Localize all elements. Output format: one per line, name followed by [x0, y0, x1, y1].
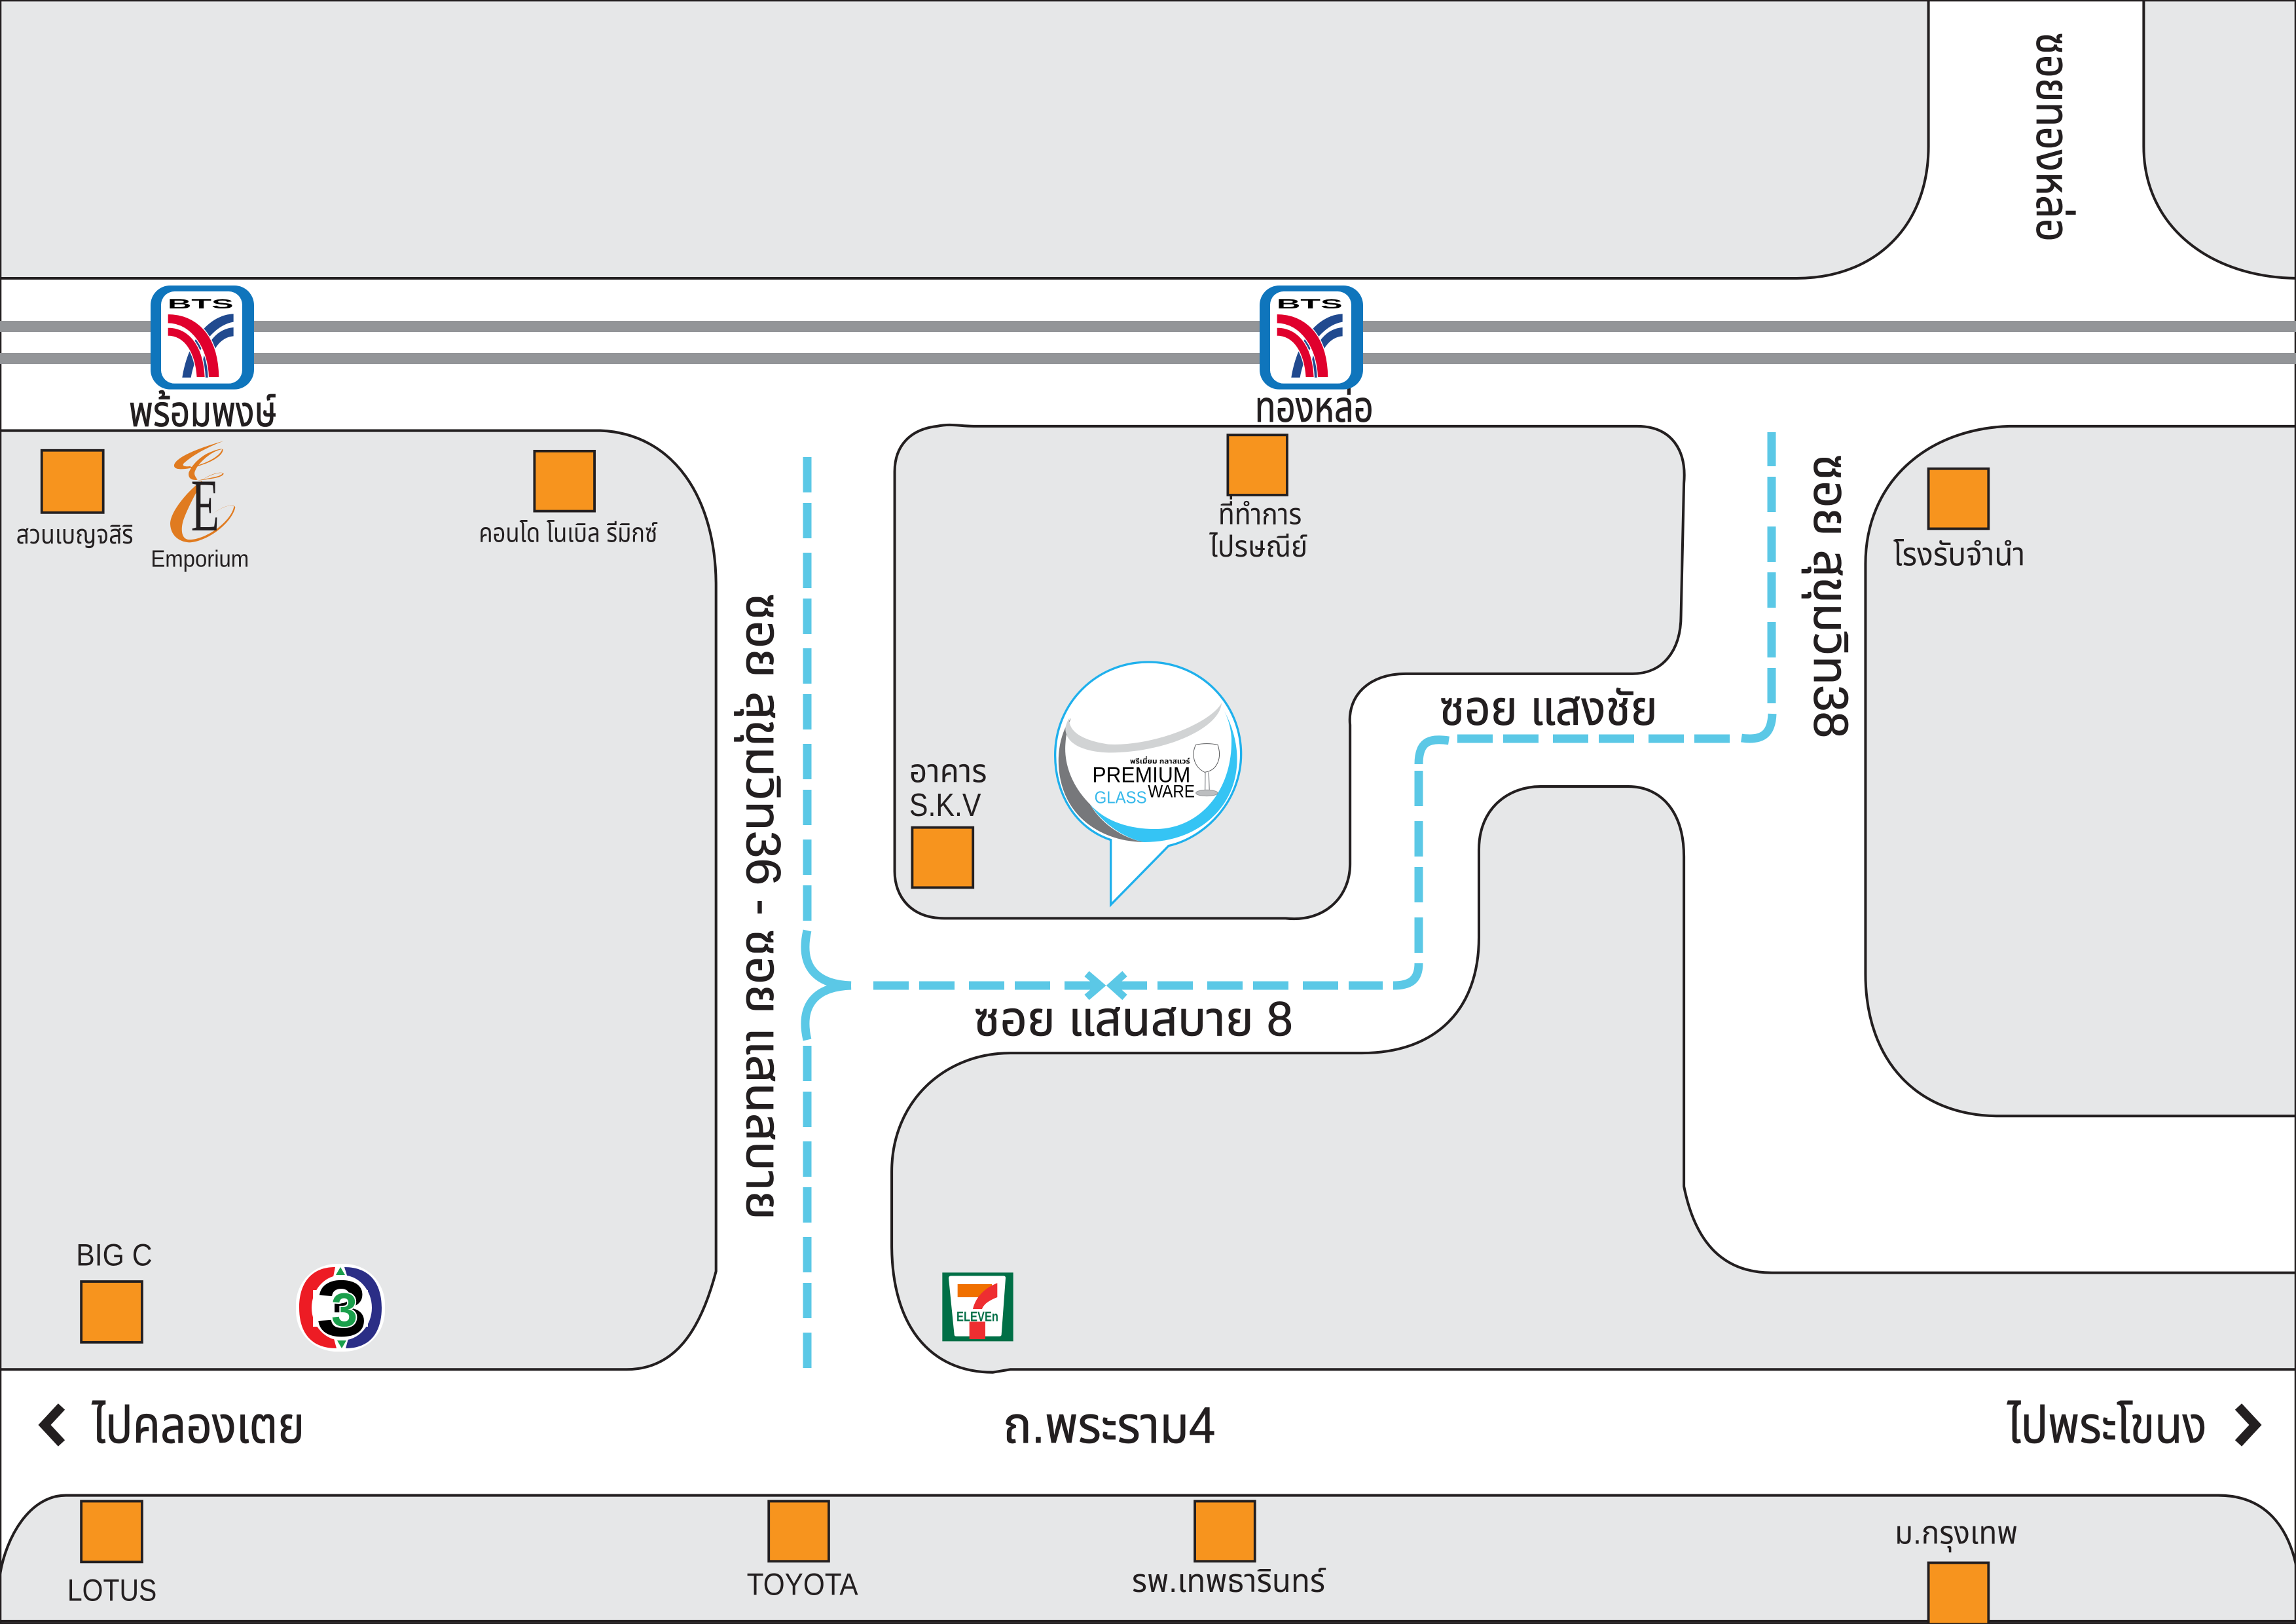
orange place markers: [42, 435, 1988, 1624]
label: Lotus: LOTUS: [67, 1573, 156, 1608]
icon: BTS Phrom Phong: [151, 286, 254, 390]
road label: Soi Saengchai: ซอย แสงชัย: [1440, 681, 1658, 735]
label: pawn shop: โรงรับจำนำ: [1893, 536, 2025, 572]
logo text: Ware: WARE: [1148, 782, 1195, 802]
swoosh: light grey: [1065, 703, 1222, 752]
logo text: Premium: PREMIUM: [1092, 763, 1190, 787]
BTS rail lines: [0, 321, 2296, 364]
road label: Soi Saensabai 8: ซอย แสนสบาย 8: [974, 991, 1293, 1046]
icon: BTS Thong Lo: [1260, 286, 1363, 390]
block: top right: [2143, 0, 2296, 278]
icon: Emporium logo: [170, 441, 235, 547]
road label: Sukhumvit 36: ซอย สุขุมวิท36 - ซอย แสนสบาย: [735, 593, 791, 1220]
block: centre with destination: [895, 425, 1685, 919]
block: left: [0, 431, 716, 1369]
block: top left: [0, 0, 1929, 278]
icon: BTS Thong Lo: BTS: [1277, 297, 1343, 312]
icon: Channel 3 logo: [296, 1264, 385, 1353]
icon: Channel 3 logo: 3: [331, 1284, 357, 1337]
swoosh: cyan: [1090, 707, 1237, 842]
label: Emporium: Emporium: [151, 546, 249, 572]
icon: 7-Eleven logo: [942, 1272, 1013, 1341]
icon: 7-Eleven logo: ELEVEn: [957, 1308, 998, 1324]
icon: Emporium logo: E: [191, 464, 219, 547]
label: Theptarin hospital: รพ.เทพธารินทร์: [1132, 1563, 1326, 1599]
road label: to Khlong Toei: ไปคลองเตย: [91, 1396, 304, 1454]
label: Benjasiri park: สวนเบญจสิริ: [16, 520, 134, 549]
label: post office line 2: ไปรษณีย์: [1209, 531, 1307, 563]
road label: to Phra Khanong: ไปพระโขนง: [2007, 1396, 2207, 1454]
icon: wine glass: [1194, 744, 1219, 796]
swoosh: grey: [1059, 718, 1144, 842]
logo text: Glass: GLASS: [1095, 788, 1147, 807]
label: Bangkok University: ม.กรุงเทพ: [1895, 1515, 2018, 1552]
label: SKV: S.K.V: [909, 787, 981, 823]
station label: Thong Lo: ทองหล่อ: [1255, 383, 1374, 431]
road label: Soi Thong Lo: ซอยทองหล่อ: [2027, 32, 2078, 242]
icon: Channel 3 logo: 3: [316, 1264, 367, 1353]
block: bottom: [0, 1496, 2296, 1621]
road label: Rama 4: ถ.พระราม4: [1003, 1396, 1215, 1454]
label: SKV building: อาคาร: [909, 753, 987, 789]
route: dashed lines: [805, 432, 1772, 1368]
label: post office: ที่ทำการ: [1218, 494, 1302, 531]
block: right: [1865, 426, 2296, 1116]
logo text: Thai: พรีเมี่ยม กลาสแวร์: [1130, 756, 1190, 766]
label: Noble Remix: คอนโด โนเบิล รีมิกซ์: [479, 519, 657, 548]
icon: BTS Phrom Phong: BTS: [168, 297, 234, 312]
arrow: right: [2238, 1407, 2255, 1443]
station label: Phrom Phong: พร้อมพงษ์: [129, 388, 277, 435]
destination marker: Premium Glassware: [1055, 662, 1241, 905]
label: Toyota: TOYOTA: [747, 1567, 858, 1602]
arrow: left: [45, 1407, 62, 1443]
pin outline: [1055, 662, 1241, 905]
road label: Sukhumvit 38: ซอย สุขุมวิท38: [1802, 454, 1858, 738]
block: lower centre: [892, 786, 2296, 1373]
label: Big C: BIG C: [76, 1237, 153, 1272]
